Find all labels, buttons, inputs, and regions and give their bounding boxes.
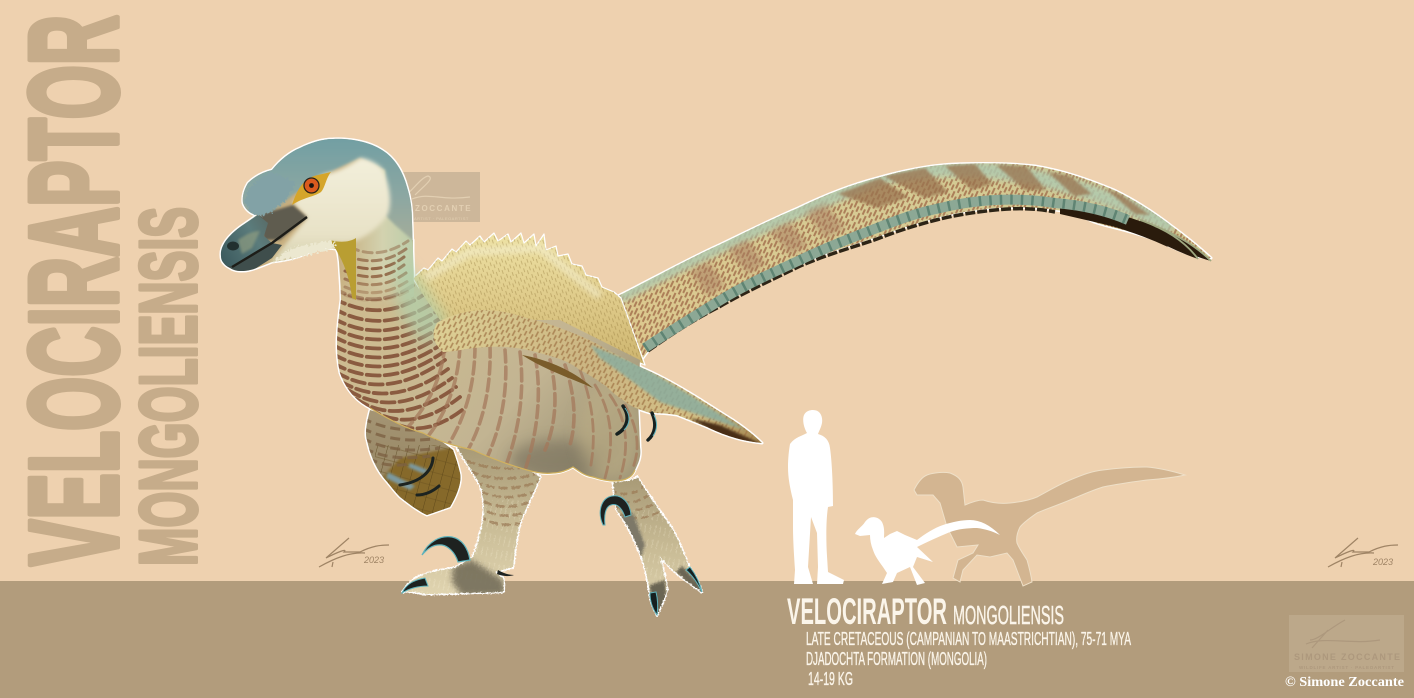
watermark: upper logo xyxy=(385,172,480,222)
size comparison: human silhouette xyxy=(788,410,844,584)
white cut-out outline xyxy=(221,139,1211,515)
signature right xyxy=(1328,538,1398,567)
watermark: upper logo: ARTIST · PALEOARTIST xyxy=(414,216,469,221)
tail tip feathers xyxy=(1060,208,1211,261)
near leg sickle claw xyxy=(422,537,470,562)
mass text: 14-19 KG xyxy=(808,668,853,689)
watermark: lower logo xyxy=(1289,615,1404,672)
species title: MONGOLIENSIS xyxy=(953,600,1064,630)
period text: LATE CRETACEOUS (CAMPANIAN TO MAASTRICHTIAN), 75-71 MYA xyxy=(806,628,1131,649)
head and neck xyxy=(220,138,414,303)
size comparison: velociraptor silhouette xyxy=(855,517,1000,585)
forehead fuzz xyxy=(245,172,296,216)
tail xyxy=(619,163,1212,358)
beak upper xyxy=(218,215,272,266)
far raised arm/leg xyxy=(366,410,460,515)
teal wing feathers xyxy=(590,345,745,430)
crown teal xyxy=(237,138,413,241)
size comparison: large raptor silhouette xyxy=(914,467,1185,586)
beak lower jaw xyxy=(224,243,282,272)
formation text: DJADOCHTA FORMATION (MONGOLIA) xyxy=(806,648,987,669)
body lower yellow edge xyxy=(370,408,635,481)
ground band xyxy=(0,581,1414,698)
far leg toe claws xyxy=(650,567,702,615)
near leg toe claw xyxy=(402,578,428,593)
chest barring xyxy=(333,280,466,428)
species title: VELOCIRAPTOR xyxy=(787,591,947,632)
watermark: lower logo: SIMONE ZOCCANTE xyxy=(1294,652,1400,662)
signature left xyxy=(319,538,389,567)
neck to wing green blend xyxy=(398,255,448,345)
belly barring xyxy=(405,345,637,478)
wing xyxy=(434,310,762,443)
signature left: 2023 xyxy=(363,555,384,565)
white cheek xyxy=(268,158,390,266)
dinosaur illustration xyxy=(218,130,1220,615)
face grey patch xyxy=(258,205,307,240)
watermark: upper logo: ZOCCANTE xyxy=(415,204,472,213)
copyright: © Simone Zoccante xyxy=(1285,674,1404,689)
signature right: 2023 xyxy=(1372,557,1393,567)
tail green feather ribbon xyxy=(645,200,1128,351)
neck barring xyxy=(345,241,416,309)
eye xyxy=(292,172,331,205)
wing claws xyxy=(617,406,655,440)
back fuzz plumage xyxy=(414,232,646,366)
watermark: lower logo: WILDLIFE ARTIST · PALEOARTIST xyxy=(1299,665,1394,670)
near standing leg xyxy=(400,447,545,600)
hidden wing underfeather xyxy=(522,355,593,388)
belly shadow xyxy=(510,440,606,480)
torso xyxy=(333,240,642,481)
far walking leg xyxy=(600,477,705,615)
far leg sickle claw xyxy=(600,496,631,525)
throat yellow streak xyxy=(330,238,356,300)
jaw fur fringe xyxy=(270,240,336,263)
